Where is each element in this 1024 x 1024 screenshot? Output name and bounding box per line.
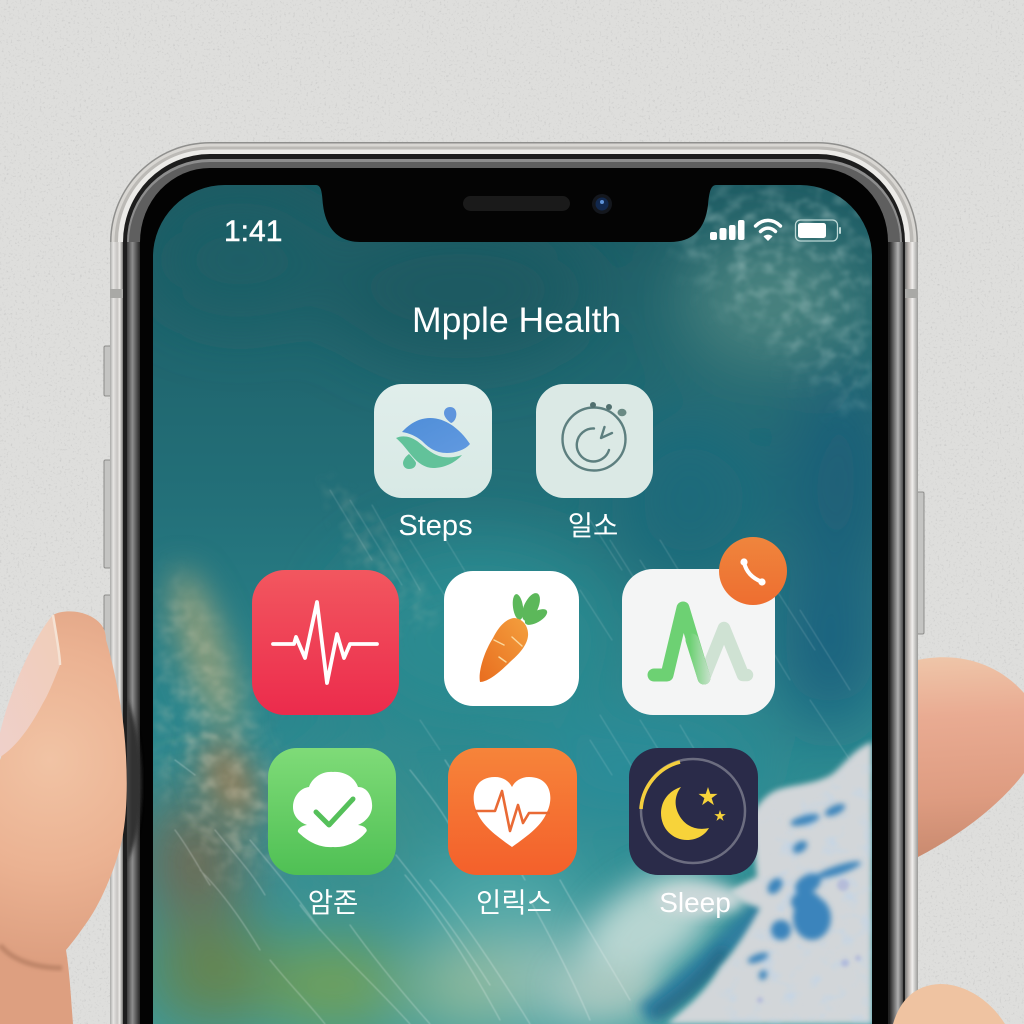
wallpaper: ocean wave — [145, 185, 890, 1024]
app: Steps — [374, 384, 492, 542]
dark wave band — [645, 905, 765, 1015]
speaker — [463, 196, 570, 211]
label: Steps — [398, 510, 473, 542]
label: 일소 — [568, 510, 618, 541]
label: 인릭스 — [476, 887, 552, 918]
app: Sleep — [629, 748, 758, 918]
app: carrot — [444, 571, 579, 706]
app: heart rate — [252, 570, 399, 715]
time: 1:41 — [224, 215, 282, 248]
bottom right finger — [893, 984, 1005, 1024]
app: stopwatch — [536, 384, 653, 541]
app: green check — [268, 748, 396, 918]
app: activity chart — [622, 537, 787, 715]
knuckle crease — [0, 945, 62, 968]
app: orange heart — [448, 748, 577, 918]
phone body — [110, 142, 918, 1024]
label: Sleep — [659, 887, 731, 918]
notification badge: phone — [719, 537, 787, 605]
wifi — [756, 220, 780, 241]
battery — [796, 220, 841, 241]
phone side buttons — [104, 346, 924, 655]
label: 암존 — [308, 887, 358, 918]
tan mottling on the left — [154, 488, 436, 887]
thumbnail — [0, 615, 60, 757]
foam bottom right — [645, 742, 872, 1024]
right finger — [918, 657, 1024, 857]
foam top right — [680, 185, 872, 414]
camera — [592, 194, 612, 214]
title: Mpple Health — [412, 300, 621, 340]
status bar — [224, 215, 841, 248]
diagonal water streaks — [175, 490, 850, 1024]
notch — [300, 170, 730, 242]
signal bars — [710, 220, 744, 240]
left thumb — [0, 611, 142, 1024]
